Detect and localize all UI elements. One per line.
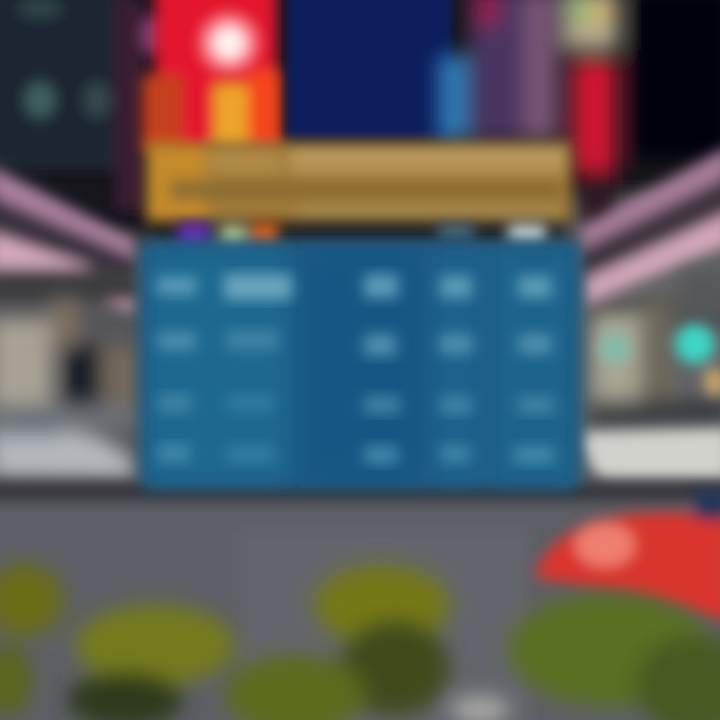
right pink awnings <box>580 145 720 328</box>
left dark building <box>0 0 169 210</box>
table row 3 <box>158 394 554 414</box>
table row 2 <box>158 330 552 356</box>
right white car <box>582 428 720 480</box>
road <box>0 482 720 720</box>
upper right signage <box>438 0 720 230</box>
gold banner <box>146 142 572 222</box>
bushes <box>0 564 720 720</box>
left pink awnings <box>0 165 135 312</box>
blue table <box>142 242 578 488</box>
left storefront <box>0 300 140 431</box>
table row 1 <box>157 274 552 300</box>
left white car <box>0 420 135 480</box>
red car <box>535 492 720 622</box>
teal lights <box>599 324 720 396</box>
background: upper street <box>0 0 720 500</box>
table columns <box>148 250 574 482</box>
rainbow strip under banner <box>178 222 546 250</box>
table row 4 <box>158 444 554 464</box>
right storefront <box>590 270 720 424</box>
navy centre panel <box>287 0 452 138</box>
red sign <box>142 0 282 150</box>
